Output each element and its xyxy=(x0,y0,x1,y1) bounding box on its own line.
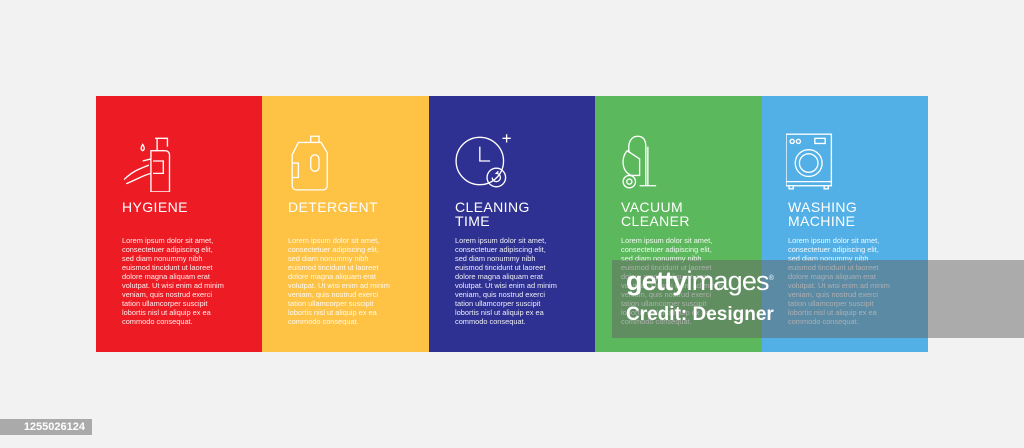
text block: euismod tincidunt ut laoreet xyxy=(788,263,878,272)
text block: dolore magna aliquam erat xyxy=(455,272,543,281)
text block: volutpat. Ut wisi enim ad minim xyxy=(288,281,390,290)
text block: tation ullamcorper suscipit xyxy=(288,299,373,308)
text block xyxy=(288,236,390,326)
watermark credit: Credit: Designer xyxy=(626,304,774,325)
title: CLEANING xyxy=(455,199,530,215)
text block: euismod tincidunt ut laoreet xyxy=(621,263,711,272)
text block: veniam, quis nostrud exerci xyxy=(788,290,878,299)
text block: dolore magna aliquam erat xyxy=(122,272,210,281)
text block: veniam, quis nostrud exerci xyxy=(455,290,545,299)
icon: clock xyxy=(455,134,511,188)
title: MACHINE xyxy=(788,213,855,229)
title: VACUUM xyxy=(621,199,683,215)
text block: Lorem ipsum dolor sit amet, xyxy=(621,236,712,245)
text block: sed diam nonummy nibh xyxy=(455,254,536,263)
icon: vacuum xyxy=(622,136,656,188)
title: WASHING xyxy=(788,199,857,215)
text block: lobortis nisl ut aliquip ex ea xyxy=(788,308,877,317)
text block: dolore magna aliquam erat xyxy=(288,272,376,281)
text block xyxy=(122,236,224,326)
text block xyxy=(455,236,557,326)
text block xyxy=(788,236,890,326)
panel: detergent xyxy=(262,96,429,352)
panel: cleaning time xyxy=(429,96,596,352)
text block: commodo consequat. xyxy=(788,317,859,326)
watermark logo: gettyimages® xyxy=(626,266,773,296)
text block: veniam, quis nostrud exerci xyxy=(122,290,212,299)
title: DETERGENT xyxy=(288,199,378,215)
panel: vacuum cleaner xyxy=(595,96,762,352)
title xyxy=(621,199,690,229)
title xyxy=(455,199,530,229)
text block: commodo consequat. xyxy=(455,317,526,326)
text block: Lorem ipsum dolor sit amet, xyxy=(288,236,379,245)
icon: detergent bottle xyxy=(292,136,328,190)
text block: sed diam nonummy nibh xyxy=(122,254,203,263)
text block: sed diam nonummy nibh xyxy=(621,254,702,263)
text block: Lorem ipsum dolor sit amet, xyxy=(788,236,879,245)
title: HYGIENE xyxy=(122,199,188,215)
text block: Lorem ipsum dolor sit amet, xyxy=(122,236,213,245)
text block: tation ullamcorper suscipit xyxy=(455,299,540,308)
text block: consectetuer adipiscing elit, xyxy=(122,245,213,254)
panel: hygiene xyxy=(96,96,263,352)
text block: sed diam nonummy nibh xyxy=(288,254,369,263)
text block: lobortis nisl ut aliquip ex ea xyxy=(455,308,544,317)
text block: consectetuer adipiscing elit, xyxy=(788,245,879,254)
icon: washing machine xyxy=(786,134,832,190)
title: TIME xyxy=(455,213,490,229)
text block: commodo consequat. xyxy=(288,317,359,326)
text block: commodo consequat. xyxy=(122,317,193,326)
text block: volutpat. Ut wisi enim ad minim xyxy=(455,281,557,290)
image id tag xyxy=(0,419,92,435)
text block: commodo consequat. xyxy=(621,317,692,326)
text block: lobortis nisl ut aliquip ex ea xyxy=(288,308,377,317)
text block: consectetuer adipiscing elit, xyxy=(621,245,712,254)
text block xyxy=(621,236,723,326)
image id tag: 1255026124 xyxy=(24,421,85,433)
text block: volutpat. Ut wisi enim ad minim xyxy=(122,281,224,290)
text block: lobortis nisl ut aliquip ex ea xyxy=(122,308,211,317)
text block: dolore magna aliquam erat xyxy=(621,272,709,281)
text block: tation ullamcorper suscipit xyxy=(788,299,873,308)
text block: veniam, quis nostrud exerci xyxy=(621,290,711,299)
text block: tation ullamcorper suscipit xyxy=(122,299,207,308)
watermark band xyxy=(612,260,1024,338)
text block: tation ullamcorper suscipit xyxy=(621,299,706,308)
text block: volutpat. Ut wisi enim ad minim xyxy=(788,281,890,290)
text block: lobortis nisl ut aliquip ex ea xyxy=(621,308,710,317)
text block: Lorem ipsum dolor sit amet, xyxy=(455,236,546,245)
text block: sed diam nonummy nibh xyxy=(788,254,869,263)
text block: veniam, quis nostrud exerci xyxy=(288,290,378,299)
title xyxy=(788,199,857,229)
icon: soap dispenser xyxy=(124,138,170,192)
text block: consectetuer adipiscing elit, xyxy=(288,245,379,254)
panel: washing machine xyxy=(762,96,928,352)
text block: euismod tincidunt ut laoreet xyxy=(455,263,545,272)
text block: volutpat. Ut wisi enim ad minim xyxy=(621,281,723,290)
title: CLEANER xyxy=(621,213,690,229)
text block: consectetuer adipiscing elit, xyxy=(455,245,546,254)
text block: euismod tincidunt ut laoreet xyxy=(122,263,212,272)
text block: euismod tincidunt ut laoreet xyxy=(288,263,378,272)
text block: dolore magna aliquam erat xyxy=(788,272,876,281)
